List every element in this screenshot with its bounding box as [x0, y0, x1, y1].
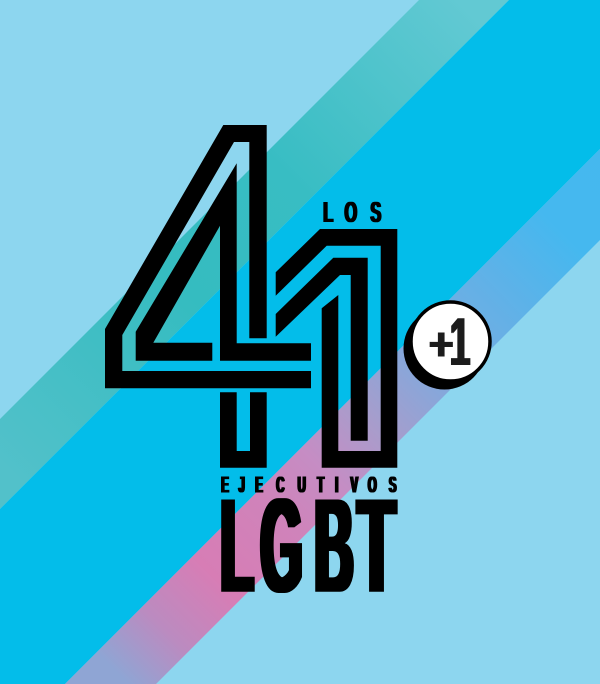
text: EJECUTIVOS: EJECUTIVOS [221, 472, 397, 497]
text: LOS: LOS [323, 196, 381, 228]
badge: digit 1: 1 [450, 303, 470, 380]
numeral 1: inner line [276, 258, 368, 441]
numeral 1 made of two parallel lines [276, 229, 397, 468]
numeral 4: lower stem U shape [220, 392, 267, 468]
badge: black ring and white disc [411, 302, 490, 381]
numeral 1: outer line [276, 229, 397, 468]
band: teal diagonal [0, 0, 509, 509]
badge: plus sign: + [429, 319, 454, 371]
band: pink to blue gradient diagonal [65, 149, 600, 684]
badge: drop shadow [404, 308, 486, 390]
numeral 4 made of two parallel lines [105, 125, 311, 468]
numeral 4: inner line [136, 163, 311, 361]
numeral 4: outer line [105, 125, 311, 388]
text: LGBT: L [221, 471, 253, 621]
text: LGBT: B [315, 471, 353, 621]
text: LGBT: T [358, 472, 395, 621]
badge: +1 circle [404, 302, 490, 390]
text: LGBT: G [261, 471, 302, 621]
text: LGBT [221, 471, 395, 621]
